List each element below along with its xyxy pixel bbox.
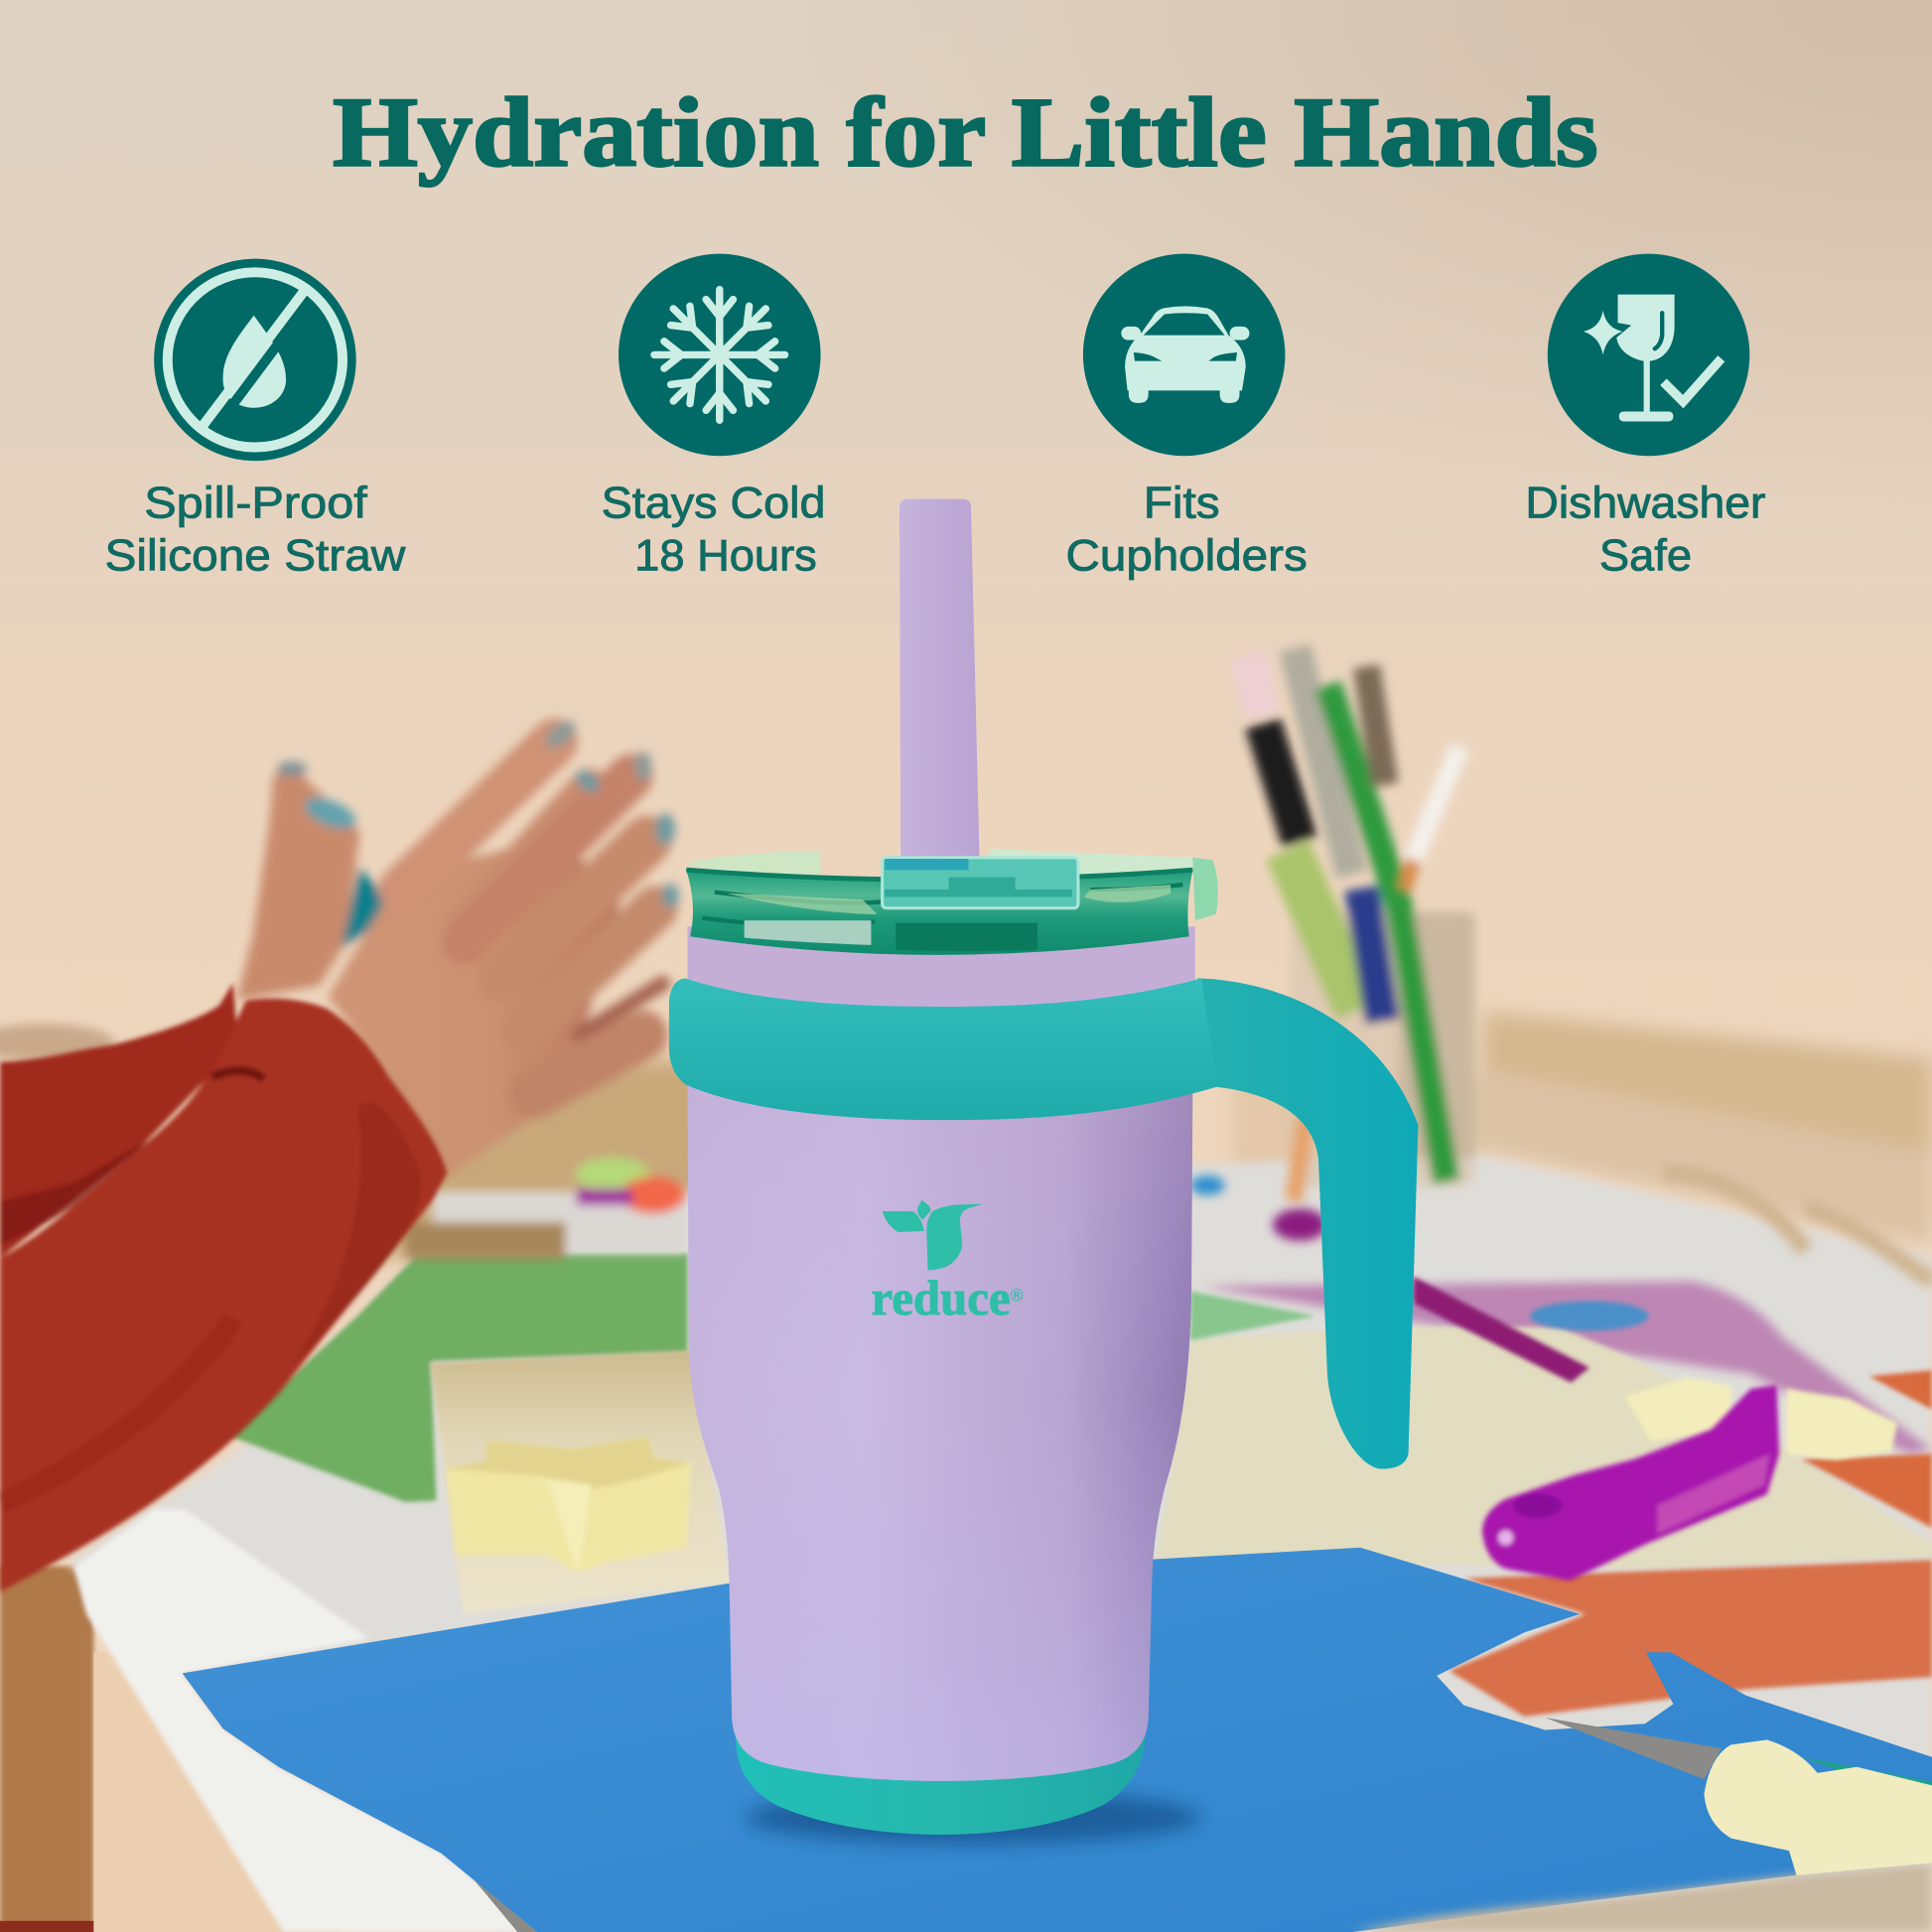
logo: reduce: ® — [1011, 1286, 1024, 1306]
label: Spill-Proof — [144, 479, 367, 527]
icon: crossed-out water drop — [154, 259, 356, 461]
label — [104, 479, 406, 581]
table front edge — [73, 1509, 537, 1932]
bottom rim — [736, 1725, 1146, 1835]
icon: glass, sparkle and check — [1548, 254, 1749, 456]
tumbler body — [688, 1084, 1192, 1781]
collar — [688, 926, 1195, 1011]
front hand fingers — [402, 742, 663, 1094]
label: Stays Cold — [602, 479, 826, 527]
teal band — [669, 978, 1217, 1120]
product: lilac tumbler with teal handle — [669, 499, 1418, 1845]
feature: dishwasher safe — [1525, 254, 1766, 581]
label: Fits — [1144, 479, 1220, 527]
magenta craft scissors — [1482, 1385, 1779, 1581]
label: Cupholders — [1066, 532, 1308, 581]
feature: stays cold — [602, 254, 826, 581]
logo: reduce: reduce — [871, 1271, 1011, 1325]
wavy yellow paper trimmer blades — [1625, 1378, 1897, 1460]
rear hand — [236, 767, 359, 1001]
child's arms and hands — [0, 716, 679, 1591]
front sleeve — [0, 999, 448, 1591]
icon: car — [1083, 254, 1285, 456]
twine on right of table — [1663, 1173, 1932, 1282]
pencil jar with brushes — [1248, 648, 1475, 1201]
icon: snowflake — [619, 254, 821, 456]
blue paper sheet — [183, 1548, 1932, 1932]
lid — [686, 849, 1218, 955]
rear sleeve — [0, 983, 240, 1258]
tumbler shadow — [746, 1790, 1201, 1845]
label — [1066, 479, 1308, 581]
scissors handle bottom right — [1545, 1718, 1932, 1875]
hair behind — [0, 1024, 114, 1061]
coloured paper sheets — [228, 1253, 1932, 1717]
label — [602, 479, 826, 581]
straw — [899, 499, 980, 863]
logo: reduce — [871, 1200, 1024, 1325]
front hand palm — [328, 838, 622, 1176]
label — [1525, 479, 1766, 581]
label: Dishwasher — [1525, 479, 1766, 527]
label: 18 Hours — [634, 532, 817, 581]
feature: spill-proof — [104, 259, 406, 581]
blurred craft scraps — [405, 1157, 1327, 1259]
handle — [1197, 978, 1418, 1468]
label: Silicone Straw — [104, 532, 406, 581]
table surface — [68, 1152, 1932, 1932]
yellow star cutter — [446, 1437, 691, 1573]
title: Hydration for Little Hands — [333, 78, 1598, 187]
label: Safe — [1599, 532, 1692, 581]
bottom right foreground blur — [1353, 1863, 1932, 1932]
feature: fits cupholders — [1066, 254, 1308, 581]
